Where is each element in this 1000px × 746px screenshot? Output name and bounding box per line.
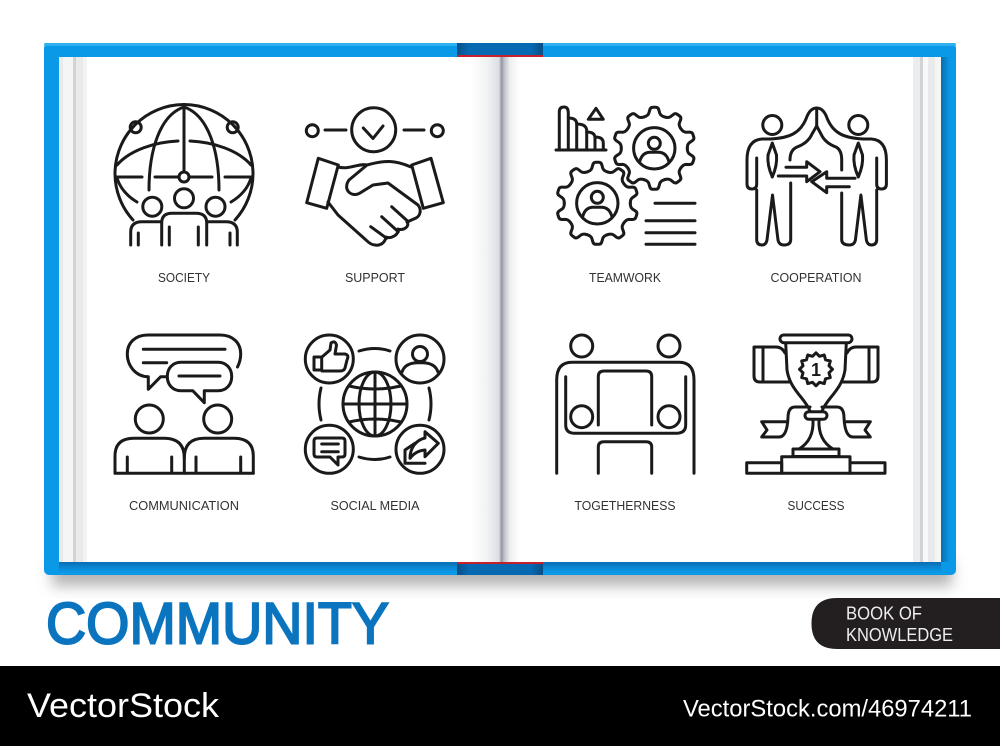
badge: book of knowledge	[812, 598, 1000, 649]
label: teamwork: TEAMWORK	[589, 270, 661, 285]
watermark url: VectorStock.com/46974211	[683, 696, 972, 722]
icon: social media	[305, 335, 444, 473]
badge: book of knowledge: BOOK OF	[846, 602, 922, 624]
top spine band	[457, 43, 543, 57]
icon: communication	[115, 335, 253, 473]
book shadow	[52, 560, 952, 586]
left page edges	[59, 57, 87, 562]
label: cooperation: COOPERATION	[770, 270, 862, 285]
right page edges	[913, 57, 941, 562]
watermark logo: VectorStock	[27, 687, 220, 725]
icon: teamwork	[555, 107, 696, 244]
label: support: SUPPORT	[345, 270, 405, 285]
title: COMMUNITY	[46, 592, 389, 656]
label: social media: SOCIAL MEDIA	[330, 498, 420, 513]
label: communication: COMMUNICATION	[129, 498, 239, 513]
icon: society	[115, 105, 253, 245]
icon: cooperation	[747, 108, 886, 245]
badge: book of knowledge: KNOWLEDGE	[846, 624, 953, 645]
footer bar	[0, 666, 1000, 746]
trophy number: 1	[811, 360, 821, 380]
book cover	[44, 43, 956, 575]
pages	[59, 57, 941, 562]
open book	[44, 43, 956, 575]
icon: togetherness	[557, 335, 694, 473]
bottom spine band	[457, 562, 543, 575]
label: success: SUCCESS	[788, 498, 845, 513]
label: society: SOCIETY	[158, 270, 210, 285]
centre fold shadow	[470, 57, 520, 562]
label: togetherness: TOGETHERNESS	[574, 498, 676, 513]
icon: success trophy	[747, 335, 885, 473]
icon: support handshake	[306, 108, 443, 245]
